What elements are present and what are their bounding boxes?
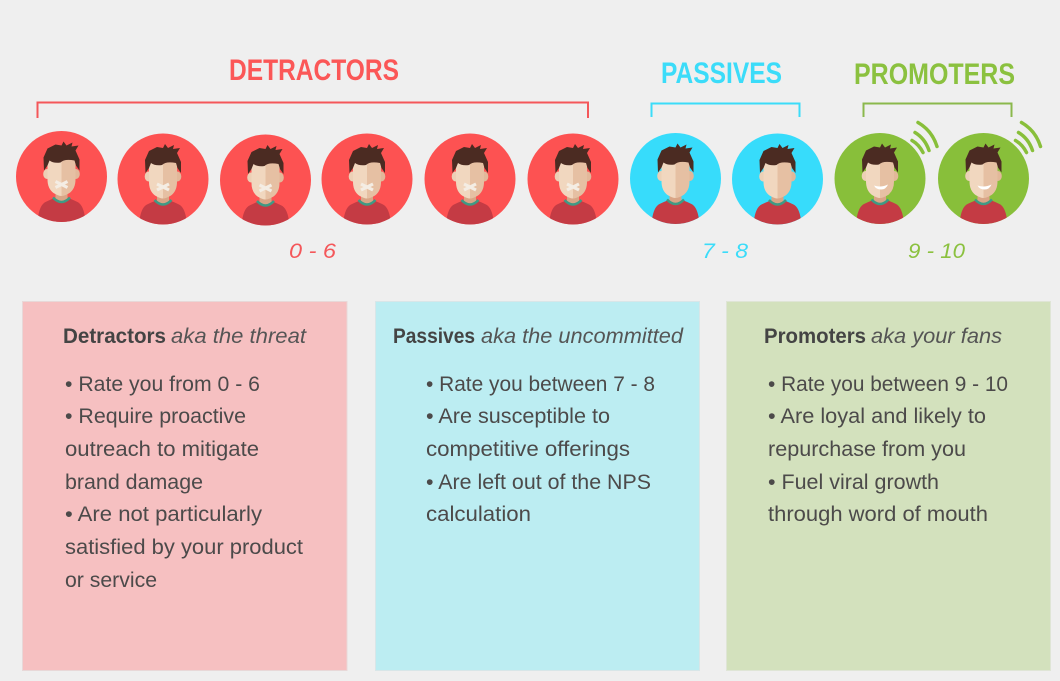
bullet list: detractors: brand damage — [65, 471, 203, 494]
score range: promoters: 9 - 10 — [908, 240, 965, 263]
panel: detractors — [22, 302, 347, 670]
heading: promoters: PROMOTERS — [854, 58, 1015, 91]
panel: promoters — [726, 302, 1050, 670]
bracket: detractors — [38, 102, 588, 118]
icon: passive 2 — [732, 134, 823, 229]
bullet list: passives: competitive offerings — [426, 438, 630, 461]
icon: detractor 1 — [16, 131, 107, 226]
bullet list: promoters: repurchase from you — [768, 438, 966, 461]
icon: detractor 5 — [424, 134, 516, 229]
panel title: detractors: aka the threat — [171, 325, 307, 348]
icon: detractor 3 — [220, 134, 311, 230]
bullet list: promoters: • Are loyal and likely to — [768, 405, 986, 428]
bullet list: promoters — [768, 373, 1008, 526]
panel title: passives: Passives — [393, 325, 475, 348]
panel: passives — [376, 302, 700, 670]
bullet list: passives: • Are left out of the NPS — [426, 471, 651, 494]
bullet list: promoters: • Fuel viral growth — [768, 471, 939, 494]
bracket: promoters — [864, 104, 1012, 117]
icon: promoter 2 — [938, 122, 1040, 228]
icon: detractor 4 — [322, 134, 412, 229]
bullet list: detractors: • Require proactive — [65, 405, 246, 428]
panel title: detractors — [63, 325, 307, 348]
bullet list: passives: calculation — [426, 503, 531, 526]
bracket: passives — [652, 104, 800, 117]
bullet list: detractors: or service — [65, 569, 157, 592]
bullet list: detractors: • Rate you from 0 - 6 — [65, 373, 260, 396]
icon: detractor 2 — [118, 134, 208, 229]
panel title: detractors: Detractors — [63, 325, 166, 348]
bullet list: promoters: through word of mouth — [768, 503, 988, 526]
heading: detractors: DETRACTORS — [229, 54, 399, 87]
panel title: promoters — [764, 325, 1003, 348]
panel title: passives: aka the uncommitted — [481, 325, 684, 348]
score range: detractors: 0 - 6 — [289, 240, 336, 263]
bullet list: detractors — [65, 373, 303, 592]
bullet list: detractors: outreach to mitigate — [65, 438, 259, 461]
panel title: passives — [393, 325, 684, 348]
panel title: promoters: Promoters — [764, 325, 866, 348]
icon: passive 1 — [630, 133, 721, 228]
bullet list: passives — [426, 373, 655, 526]
heading: passives: PASSIVES — [661, 57, 782, 90]
bullet list: passives: • Are susceptible to — [426, 405, 610, 428]
panel title: promoters: aka your fans — [871, 325, 1003, 348]
bullet list: promoters: • Rate you between 9 - 10 — [768, 373, 1008, 396]
icon: promoter 1 — [834, 122, 937, 228]
bullet list: detractors: • Are not particularly — [65, 503, 263, 526]
bullet list: passives: • Rate you between 7 - 8 — [426, 373, 655, 396]
bullet list: detractors: satisfied by your product — [65, 536, 303, 559]
score range: passives: 7 - 8 — [702, 240, 748, 263]
icon: detractor 6 — [528, 134, 618, 229]
